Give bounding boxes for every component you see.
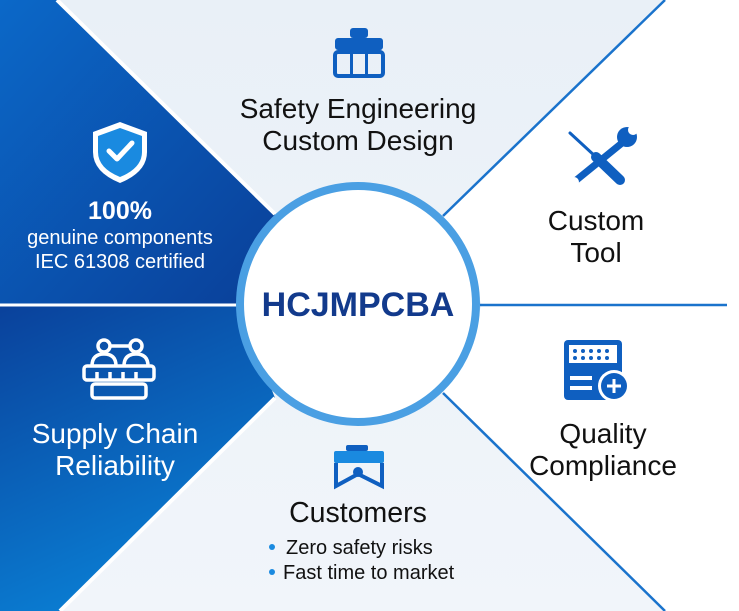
icon: tools <box>569 125 638 187</box>
heading: customers: Customers <box>289 497 427 529</box>
right white zone <box>443 0 739 611</box>
icon: supply chain <box>84 340 154 398</box>
icon: customers <box>334 445 384 486</box>
text: 100% genuine: genuine components <box>27 227 213 249</box>
heading: supply chain: Reliability <box>55 450 175 481</box>
heading: quality compliance: Compliance <box>529 450 677 481</box>
bullet list: Zero safety risks <box>286 537 433 559</box>
bullet list: Fast time to market <box>283 562 455 584</box>
icon: shield <box>93 122 147 183</box>
bullet list <box>269 537 455 584</box>
center circle: HCJMPCBA <box>262 286 454 324</box>
heading: supply chain: Supply Chain <box>32 418 198 449</box>
panel: left top blue <box>0 0 275 305</box>
heading: safety engineering: Safety Engineering <box>240 93 476 124</box>
icon: quality <box>564 340 630 402</box>
center circle <box>240 186 476 422</box>
heading: custom tool: Custom <box>548 205 644 236</box>
icon: safety engineering <box>335 28 383 76</box>
text: 100% genuine: IEC 61308 certified <box>35 251 205 273</box>
text: 100% genuine <box>27 197 213 273</box>
panel: left bottom blue <box>0 305 275 611</box>
text: 100% genuine: 100% <box>88 197 152 225</box>
heading: safety engineering: Custom Design <box>262 125 454 156</box>
heading: quality compliance: Quality <box>559 418 647 449</box>
heading: custom tool: Tool <box>570 237 622 268</box>
